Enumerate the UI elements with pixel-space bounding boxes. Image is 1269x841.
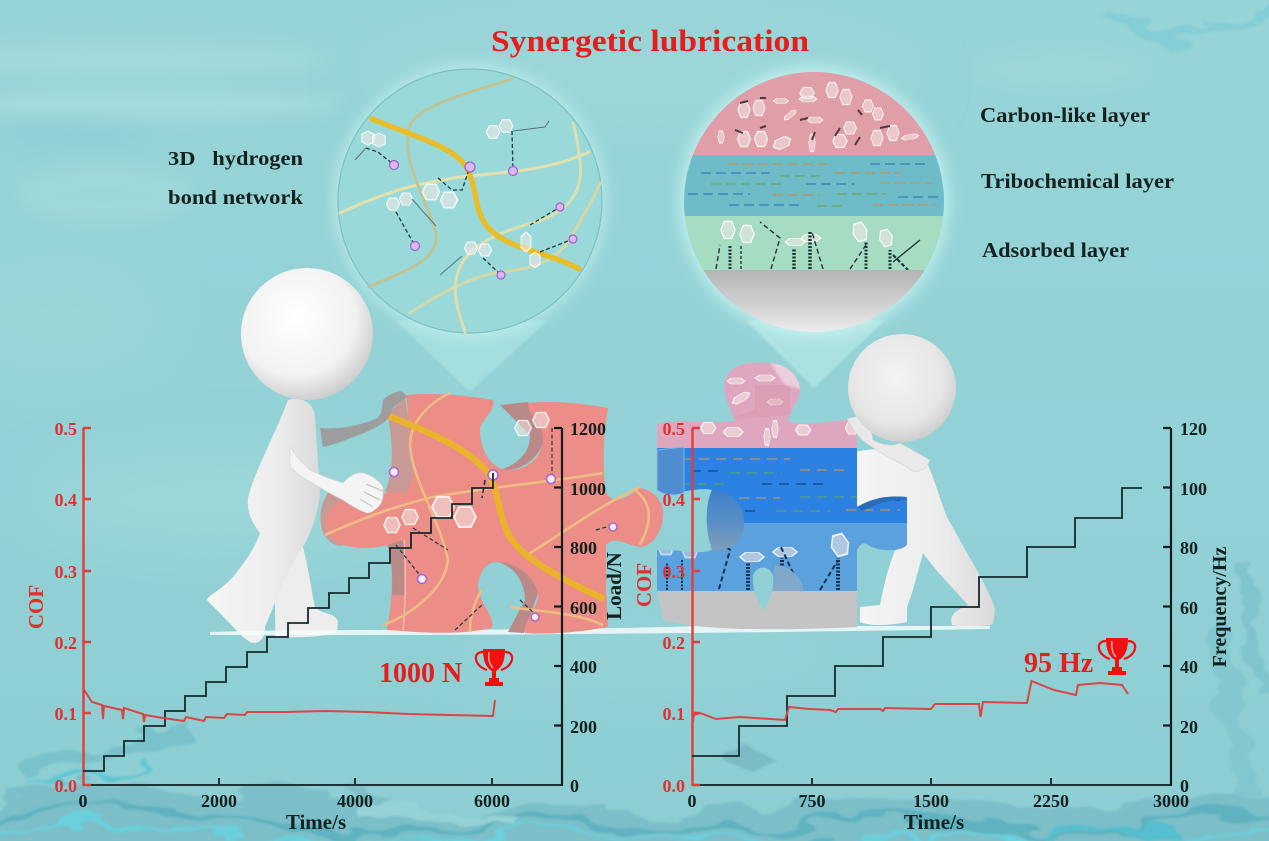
icon: trophy left xyxy=(476,649,512,686)
tick labels: load: 600 xyxy=(570,598,597,618)
label: adsorbed layer: Adsorbed layer xyxy=(982,238,1129,262)
chart: COF vs load xyxy=(24,419,626,834)
tick labels: frequency: 80 xyxy=(1180,538,1198,558)
tick labels: time xyxy=(78,791,510,811)
tick labels: frequency: 40 xyxy=(1180,657,1198,677)
head xyxy=(241,268,373,400)
callout: 1000 N: 1000 N xyxy=(379,658,462,689)
panel: 3D hydrogen bond network bubble xyxy=(336,67,604,335)
tick labels: COF: 0.4 xyxy=(662,490,685,510)
tick labels: load: 800 xyxy=(570,538,597,558)
tick labels: time: 0 xyxy=(78,791,88,811)
figure: left person body xyxy=(207,268,373,643)
back leg xyxy=(275,530,338,637)
title: Synergetic lubrication xyxy=(491,23,809,58)
tick labels: frequency xyxy=(1180,419,1207,796)
tick labels: time xyxy=(688,791,1189,811)
label: 3D hydrogen bond network xyxy=(168,148,304,209)
tick labels: time: 750 xyxy=(798,791,826,811)
axis: bottom time xyxy=(83,778,563,785)
tick labels: COF: 0.1 xyxy=(54,704,77,724)
axis: frequency xyxy=(1163,428,1171,786)
layer: carbon-like xyxy=(692,72,935,155)
polymer strand thick xyxy=(388,416,604,599)
tick labels: time: 0 xyxy=(688,791,696,811)
arm holding top of puzzle xyxy=(320,391,407,447)
layer: adsorbed xyxy=(680,216,950,270)
layer: tribochemical xyxy=(680,155,950,216)
figure: right person arm xyxy=(847,334,956,471)
figure: right person body xyxy=(850,449,995,626)
tick labels: load: 0 xyxy=(570,776,579,796)
axis title: load: Load/N xyxy=(602,552,626,620)
tick labels: load: 1000 xyxy=(570,479,606,499)
torso and front leg xyxy=(207,399,320,643)
axis title: time: Time/s xyxy=(286,810,346,834)
tick labels: time: 2250 xyxy=(1033,791,1069,811)
series: load steps xyxy=(83,473,493,771)
tick labels: COF xyxy=(662,419,685,796)
tick labels: COF: 0.2 xyxy=(662,633,685,653)
tick labels: frequency: 120 xyxy=(1180,419,1207,439)
label: 3D hydrogen bond network: bond network xyxy=(168,187,304,209)
axis title: COF: COF xyxy=(632,563,656,607)
tick labels: COF: 0.0 xyxy=(662,776,685,796)
tick labels: frequency: 60 xyxy=(1180,598,1198,618)
puzzle walls xyxy=(385,396,413,493)
arm with hand on puzzle xyxy=(290,447,383,513)
ground streak xyxy=(210,626,990,635)
puzzle side shading xyxy=(320,480,380,546)
tick labels: load: 1200 xyxy=(570,419,606,439)
puzzle piece: hydrogen bond network xyxy=(320,393,663,634)
axis: bottom time xyxy=(692,778,1172,785)
icon: trophy right xyxy=(1099,638,1135,675)
label: carbon-like layer: Carbon-like layer xyxy=(980,103,1150,127)
series: frequency steps xyxy=(692,488,1142,756)
tick labels: time: 2000 xyxy=(201,791,237,811)
panel: lubrication layers bubble xyxy=(680,69,950,335)
tick labels: load xyxy=(570,419,606,796)
body xyxy=(850,449,995,626)
arm pushing puzzle xyxy=(847,417,930,471)
tick labels: time: 1500 xyxy=(913,791,949,811)
tick labels: COF xyxy=(54,419,77,796)
tick labels: load: 400 xyxy=(570,657,597,677)
label: tribochemical layer: Tribochemical layer xyxy=(981,169,1174,193)
axis: COF xyxy=(83,428,91,786)
tick labels: load: 200 xyxy=(570,717,597,737)
tick labels: frequency: 0 xyxy=(1180,776,1189,796)
chart: COF vs frequency xyxy=(632,419,1231,834)
figure: left person arms xyxy=(290,391,407,513)
tick labels: COF: 0.1 xyxy=(662,704,685,724)
label: 3D hydrogen bond network: 3D hydrogen xyxy=(168,148,303,170)
tick labels: time: 4000 xyxy=(337,791,373,811)
bubble pointer right xyxy=(745,320,885,388)
puzzle face xyxy=(325,394,663,634)
tick labels: COF: 0.5 xyxy=(662,419,685,439)
series: COF curve xyxy=(692,681,1128,727)
tick labels: COF: 0.4 xyxy=(54,490,77,510)
tick labels: time: 6000 xyxy=(474,791,510,811)
tick labels: time: 3000 xyxy=(1153,791,1189,811)
series: COF curve xyxy=(84,689,495,722)
tick labels: COF: 0.3 xyxy=(662,562,685,582)
bubble pointer left xyxy=(395,320,548,392)
tick labels: frequency: 20 xyxy=(1180,717,1198,737)
polymer strands xyxy=(325,393,649,632)
tick labels: COF: 0.0 xyxy=(54,776,77,796)
tick labels: COF: 0.2 xyxy=(54,633,77,653)
axis: load xyxy=(554,428,562,786)
axis title: COF: COF xyxy=(24,585,48,629)
tick labels: COF: 0.5 xyxy=(54,419,77,439)
puzzle side wall xyxy=(657,447,684,495)
axis: COF xyxy=(692,428,700,786)
layer: gray substrate xyxy=(703,270,925,332)
axis title: time: Time/s xyxy=(904,810,964,834)
axis title: frequency: Frequency/Hz xyxy=(1209,547,1231,667)
tick labels: frequency: 100 xyxy=(1180,479,1207,499)
puzzle piece: lubrication layers xyxy=(656,362,907,630)
tick labels: COF: 0.3 xyxy=(54,562,77,582)
head xyxy=(848,334,956,442)
callout: 95 Hz: 95 Hz xyxy=(1024,648,1093,679)
finger lines xyxy=(360,484,383,507)
